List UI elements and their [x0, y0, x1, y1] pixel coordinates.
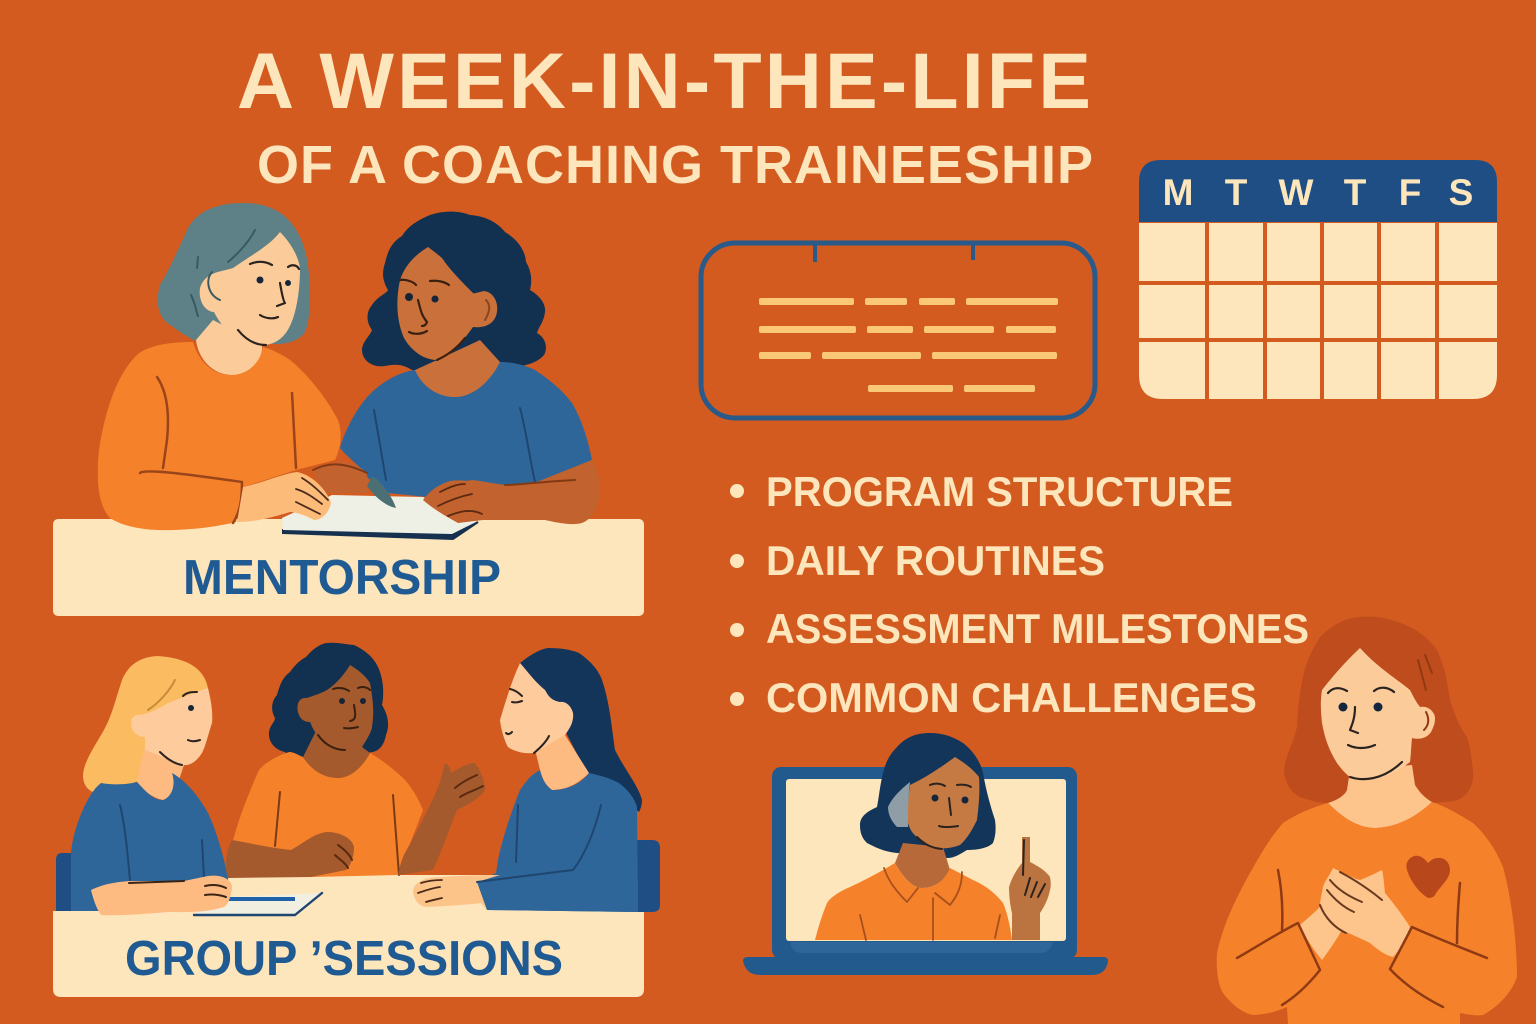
face [1321, 648, 1435, 780]
coach face [908, 757, 979, 848]
right woman hair [520, 648, 642, 812]
mentee shirt [340, 362, 592, 497]
group sessions label: GROUP ’SESSIONS [125, 932, 563, 986]
notebook [194, 893, 322, 915]
calendar icon [1139, 160, 1497, 399]
pen [367, 476, 396, 508]
topic list: DAILY ROUTINES [766, 537, 1105, 584]
right woman neck [534, 735, 589, 790]
sleeve lines [1237, 870, 1487, 1007]
mentee facial features [400, 280, 489, 360]
blonde woman hair [83, 656, 208, 792]
schedule lines [759, 298, 1058, 392]
blonde woman features [148, 680, 200, 765]
coach features [917, 784, 971, 849]
mentorship banner [53, 519, 644, 616]
sweater [1217, 802, 1517, 1024]
title [237, 36, 1093, 195]
notebook [282, 495, 478, 539]
middle woman face [297, 665, 373, 751]
headset [888, 782, 910, 827]
mentee hair [362, 212, 546, 373]
topic list [730, 468, 1309, 721]
left chair [56, 853, 72, 911]
topic list: COMMON CHALLENGES [766, 674, 1257, 721]
right woman hand [413, 875, 500, 910]
neck [1328, 765, 1432, 828]
mentor sweater [98, 342, 341, 530]
right woman face [500, 663, 573, 753]
illustration: woman with hand on heart [1217, 617, 1517, 1024]
middle woman sleeve lines [275, 792, 399, 875]
coach neck [895, 843, 950, 888]
coach hair [860, 733, 996, 858]
laptop video call icon [743, 733, 1108, 975]
blonde woman neck [137, 745, 184, 800]
group sessions table [53, 875, 644, 997]
middle woman shirt [228, 752, 423, 877]
title: OF A COACHING TRAINEESHIP [257, 135, 1093, 195]
blonde woman shirt [71, 773, 230, 911]
right woman shirt [477, 770, 638, 912]
calendar weekdays: F [1399, 172, 1421, 213]
mentor hair [158, 203, 310, 344]
facial features [1328, 655, 1432, 779]
middle woman hair [269, 643, 388, 760]
illustration: mentorship pair [98, 203, 600, 539]
middle woman left arm [226, 832, 354, 878]
mentee forearm [313, 462, 368, 493]
blonde woman face [131, 688, 212, 765]
weekly schedule board icon [701, 243, 1095, 418]
blonde woman arm [91, 876, 232, 915]
calendar weekdays [1163, 172, 1473, 213]
middle woman right arm [398, 763, 485, 875]
calendar weekdays: T [1225, 172, 1248, 213]
mentee arm [423, 460, 600, 524]
title: A WEEK-IN-THE-LIFE [237, 36, 1091, 125]
heart [1406, 856, 1450, 898]
mentee hand [423, 480, 488, 523]
mentor arm lines [140, 377, 296, 523]
clasped hands [1300, 868, 1410, 960]
right chair [636, 840, 660, 912]
mentee neck [415, 340, 500, 397]
mentorship label: MENTORSHIP [183, 551, 501, 605]
middle woman features [318, 687, 370, 750]
mentor facial features [191, 230, 299, 345]
mentor hand [237, 472, 331, 522]
right woman features [506, 689, 549, 753]
right woman sleeve lines [477, 805, 601, 882]
coach raised hand [1009, 837, 1051, 940]
calendar weekdays: W [1279, 172, 1314, 213]
topic list: PROGRAM STRUCTURE [766, 468, 1233, 515]
mentor neck [196, 320, 262, 375]
blonde woman sleeve lines [120, 805, 204, 880]
calendar weekdays: M [1163, 172, 1193, 213]
hair [1284, 617, 1473, 803]
coach shirt [815, 863, 1012, 940]
middle woman neck [303, 733, 370, 778]
mentee face [397, 247, 497, 360]
calendar weekdays: T [1344, 172, 1367, 213]
topic list: ASSESSMENT MILESTONES [766, 605, 1309, 652]
calendar cells [1139, 223, 1497, 399]
calendar weekdays: S [1449, 172, 1473, 213]
mentee sleeve lines [374, 408, 535, 482]
illustration: group session [56, 643, 660, 915]
right woman cuff [477, 860, 638, 912]
mentor face [200, 232, 300, 346]
